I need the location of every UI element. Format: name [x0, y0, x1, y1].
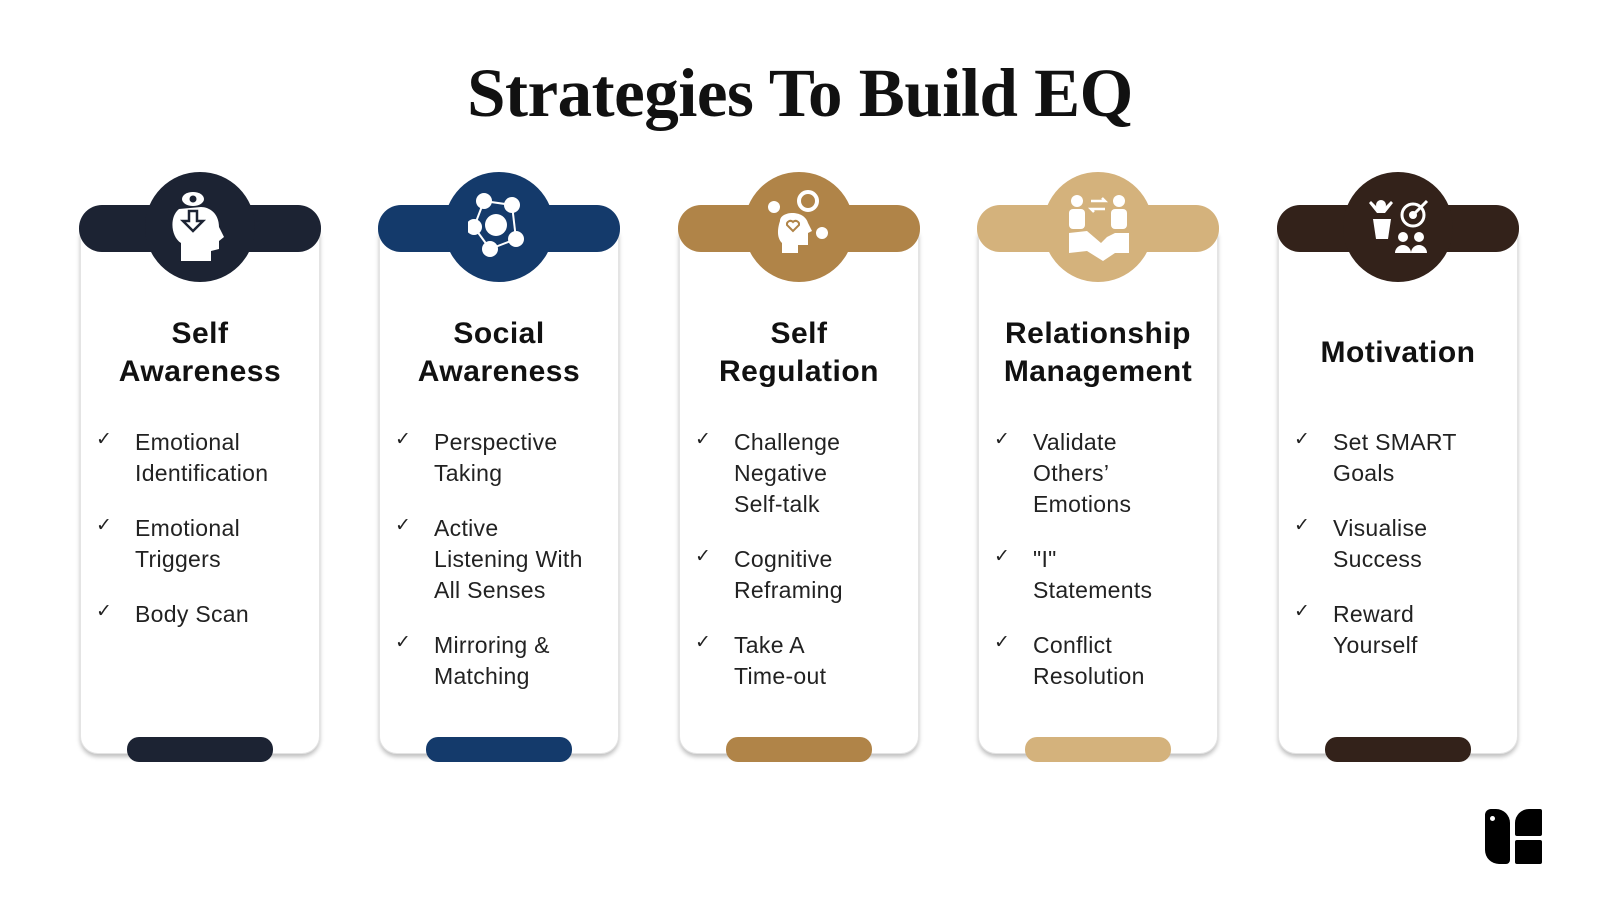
list: Negative: [734, 460, 827, 486]
list: Emotional: [135, 429, 240, 455]
icon: handshake: [1043, 172, 1153, 282]
list: Mirroring &: [434, 632, 550, 658]
list: Matching: [434, 663, 530, 689]
list: Resolution: [1033, 663, 1145, 689]
list: Identification: [135, 460, 268, 486]
title: Strategies To Build EQ: [467, 55, 1133, 131]
list: Visualise: [1333, 515, 1427, 541]
heading: Motivation: [1320, 336, 1476, 369]
list: Self-talk: [734, 491, 820, 517]
list: All Senses: [434, 577, 546, 603]
heading: Awareness: [418, 355, 580, 388]
list: Take A: [734, 632, 805, 658]
icon: head with eye: [145, 172, 255, 282]
list: Validate: [1033, 429, 1117, 455]
panel: relationship management: [976, 172, 1220, 762]
logo: [1485, 809, 1542, 864]
list: [398, 429, 583, 689]
heading: Management: [1004, 355, 1192, 388]
list: Yourself: [1333, 632, 1418, 658]
header pill: [378, 205, 620, 252]
heading: [119, 317, 281, 388]
bottom bar: [1325, 737, 1471, 762]
list: Emotional: [135, 515, 240, 541]
bottom bar: [1025, 737, 1171, 762]
header pill: [977, 205, 1219, 252]
list: Perspective: [434, 429, 557, 455]
list: [698, 429, 843, 689]
list: Challenge: [734, 429, 840, 455]
list: Emotions: [1033, 491, 1131, 517]
list: Listening With: [434, 546, 583, 572]
panel: social awareness: [376, 172, 622, 762]
list: Reframing: [734, 577, 843, 603]
header pill: [678, 205, 920, 252]
list: [996, 429, 1152, 689]
header pill: [1277, 205, 1519, 252]
bottom bar: [726, 737, 872, 762]
list: Time-out: [734, 663, 826, 689]
list: [1296, 429, 1457, 658]
list: Body Scan: [135, 601, 249, 627]
heading: Self: [770, 317, 828, 350]
list: Reward: [1333, 601, 1414, 627]
heading: [418, 317, 580, 388]
heading: Regulation: [719, 355, 879, 388]
icon: head with heart: [744, 172, 854, 282]
list: "I": [1033, 546, 1057, 572]
list: Goals: [1333, 460, 1395, 486]
heading: Relationship: [1005, 317, 1191, 350]
list: Taking: [434, 460, 502, 486]
panel: self awareness: [78, 172, 322, 762]
heading: [719, 317, 879, 388]
list: Conflict: [1033, 632, 1112, 658]
bottom bar: [127, 737, 273, 762]
list: Active: [434, 515, 498, 541]
heading: Social: [453, 317, 545, 350]
list: [98, 429, 268, 627]
icon: goal and people: [1343, 172, 1453, 282]
list: Statements: [1033, 577, 1152, 603]
list: Success: [1333, 546, 1422, 572]
list: Set SMART: [1333, 429, 1457, 455]
list: Others’: [1033, 460, 1109, 486]
bottom bar: [426, 737, 572, 762]
heading: Awareness: [119, 355, 281, 388]
heading: Self: [171, 317, 229, 350]
header pill: [79, 205, 321, 252]
panel: self regulation: [676, 172, 922, 762]
panel: motivation: [1276, 172, 1520, 762]
icon: network of people: [444, 172, 554, 282]
heading: [1004, 317, 1192, 388]
list: Triggers: [135, 546, 221, 572]
list: Cognitive: [734, 546, 833, 572]
